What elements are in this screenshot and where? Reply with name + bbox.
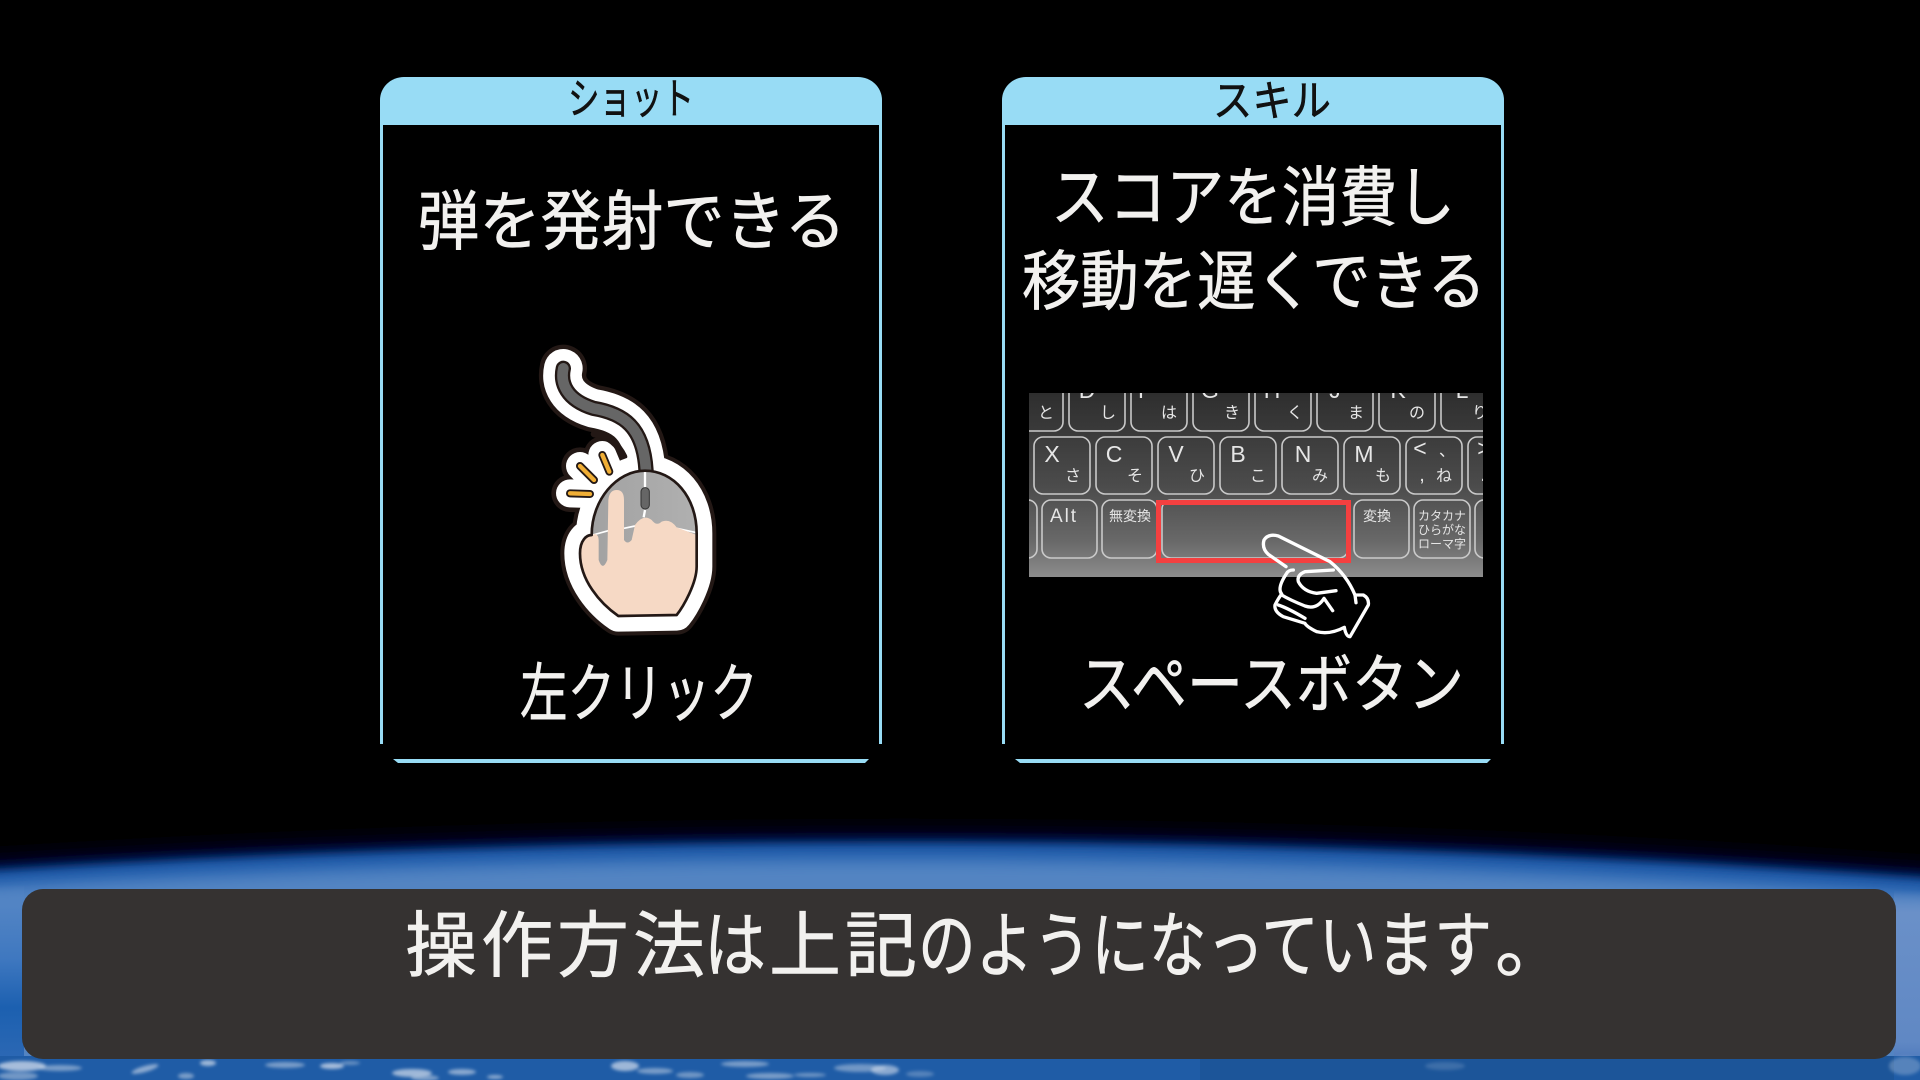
panel skill heading: スキル xyxy=(1213,67,1331,129)
keyboard key labels: も xyxy=(1375,462,1391,486)
keyboard key labels: ローマ字 xyxy=(1418,535,1466,552)
keyboard key labels: 無変換 xyxy=(1109,506,1151,526)
panel: skill xyxy=(1002,77,1504,763)
keyboard image xyxy=(1029,393,1483,577)
keyboard key labels: Alt xyxy=(1050,506,1077,527)
keyboard key labels: > xyxy=(1477,435,1491,461)
keyboard key labels: M xyxy=(1354,441,1374,467)
keyboard key labels: N xyxy=(1295,441,1311,467)
skill control label: スペースボタン xyxy=(1079,634,1464,726)
caption text: は xyxy=(704,887,766,992)
panel shot heading: ショット xyxy=(568,65,694,127)
keyboard key labels xyxy=(1041,393,1483,550)
keyboard key labels: C xyxy=(1106,441,1122,467)
keyboard key labels: は xyxy=(1161,399,1177,423)
keyboard key labels: カタカナ xyxy=(1418,507,1466,524)
panel skill header bar xyxy=(1002,77,1504,125)
panel shot header bar xyxy=(380,77,882,125)
keyboard key labels: L xyxy=(1456,377,1469,403)
keyboard key labels: と xyxy=(1038,399,1054,423)
keyboard key labels: V xyxy=(1168,441,1184,467)
keyboard key labels: , xyxy=(1419,464,1425,486)
keyboard key labels: ひらがな xyxy=(1418,521,1466,538)
red highlight on space key xyxy=(1158,502,1348,560)
keyboard key labels: ひ xyxy=(1189,462,1205,486)
keyboard key labels: ね xyxy=(1436,462,1452,486)
keyboard key labels: ま xyxy=(1348,399,1364,423)
keyboard key labels: X xyxy=(1044,441,1060,467)
keyboard key labels: り xyxy=(1472,399,1488,423)
panel: shot xyxy=(380,65,882,763)
keyboard key labels: さ xyxy=(1065,462,1081,486)
panel shot frame xyxy=(380,125,882,763)
keyboard key labels: < xyxy=(1413,435,1427,461)
keyboard key labels: く xyxy=(1287,399,1303,423)
caption text xyxy=(405,887,1567,992)
skill description: スコアを消費し xyxy=(1051,145,1455,239)
caption text: 操作方法 xyxy=(405,887,709,992)
keyboard keys outlines xyxy=(1029,393,1483,559)
keyboard key labels: J xyxy=(1329,377,1341,403)
keyboard key labels: 、 xyxy=(1439,437,1455,461)
keyboard key labels: F xyxy=(1138,377,1152,403)
icon: hand clicking a mouse xyxy=(563,368,700,620)
clouds xyxy=(0,1057,1920,1080)
caption text: 。 xyxy=(1495,887,1567,992)
caption bar xyxy=(22,887,1896,1059)
skill description: 移動を遅くできる xyxy=(1022,229,1486,323)
keyboard key labels: そ xyxy=(1127,462,1143,486)
keyboard key labels: K xyxy=(1390,377,1406,403)
caption text: のようになっています xyxy=(918,887,1492,992)
keyboard key labels: B xyxy=(1230,441,1246,467)
keyboard key labels: D xyxy=(1079,377,1095,403)
keyboard key labels: H xyxy=(1264,377,1280,403)
shot description: 弾を発射できる xyxy=(418,169,846,263)
keyboard key labels: 変換 xyxy=(1363,506,1391,526)
keyboard key labels: き xyxy=(1224,399,1240,423)
keyboard key labels: し xyxy=(1100,399,1116,423)
caption text: 上記 xyxy=(769,887,921,992)
keyboard key labels: み xyxy=(1312,462,1328,486)
keyboard key labels: . xyxy=(1480,464,1486,486)
shot control label: 左クリック xyxy=(520,643,758,735)
skill description xyxy=(1022,145,1486,323)
icon: pointing hand xyxy=(1263,535,1368,637)
keyboard key labels: の xyxy=(1409,399,1425,423)
keyboard key labels: G xyxy=(1201,377,1219,403)
panel skill frame xyxy=(1002,125,1504,763)
keyboard key labels: こ xyxy=(1250,462,1266,486)
